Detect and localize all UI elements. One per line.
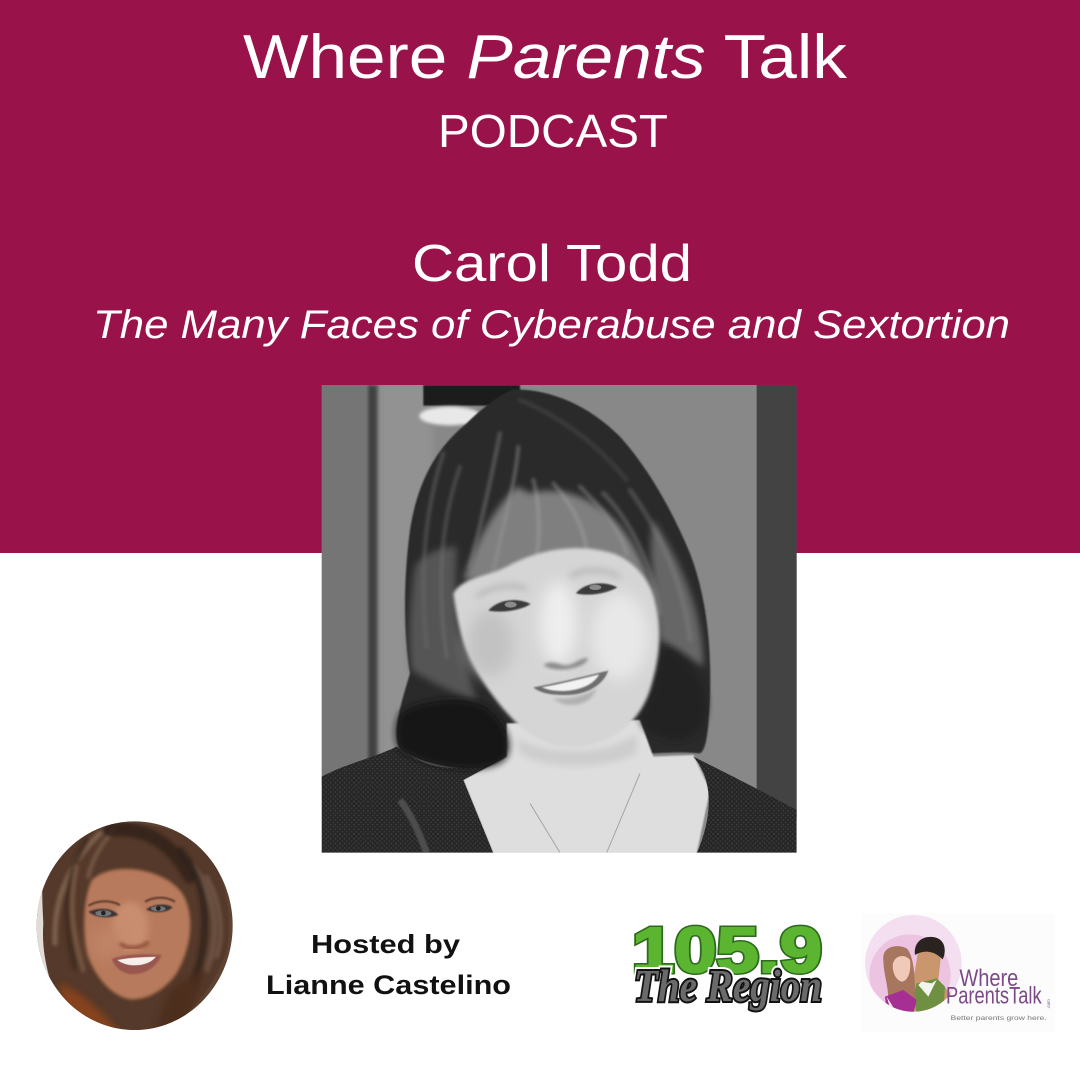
logo: 105.9 The Region: The Region xyxy=(634,960,822,1011)
maroon header panel xyxy=(0,0,1080,553)
logo: 105.9 The Region: 105.9 xyxy=(632,914,822,986)
host credit: Hosted by xyxy=(311,929,461,959)
logo illustration: parents in circle xyxy=(865,915,962,1016)
logo: Where Parents Talk xyxy=(865,915,1050,1022)
logo: 105.9 The Region: The Region xyxy=(634,960,822,1011)
sub: sweater xyxy=(322,747,507,853)
logo: 105.9 The Region: The Region xyxy=(634,960,822,1011)
logo: Where Parents Talk: ParentsTalk xyxy=(946,982,1042,1009)
logo: Where Parents Talk: .com xyxy=(1046,999,1051,1009)
host credit: Lianne Castelino xyxy=(266,970,511,1000)
logo: 105.9 The Region xyxy=(632,914,822,1011)
sub: hair strands xyxy=(424,400,690,657)
title: Where Parents Talk: Where Parents Talk xyxy=(243,23,848,92)
subtitle: PODCAST: PODCAST xyxy=(438,105,668,157)
guest name: Carol Todd xyxy=(412,235,692,293)
host portrait, circular crop xyxy=(33,817,240,1037)
sub: lower hair flips xyxy=(396,699,509,769)
logo: Where Parents Talk: Where xyxy=(959,965,1018,992)
sub: face xyxy=(453,548,659,747)
sub: hair streaks xyxy=(55,830,221,983)
sub: neck and chest xyxy=(463,720,710,853)
episode title: The Many Faces of Cyberabuse and Sextortion xyxy=(93,303,1010,347)
logo: Where Parents Talk: Better parents grow here. xyxy=(951,1015,1047,1022)
guest portrait photo xyxy=(322,385,798,853)
logo: 105.9 The Region: 105.9 xyxy=(632,914,822,986)
host credit xyxy=(266,929,511,1000)
